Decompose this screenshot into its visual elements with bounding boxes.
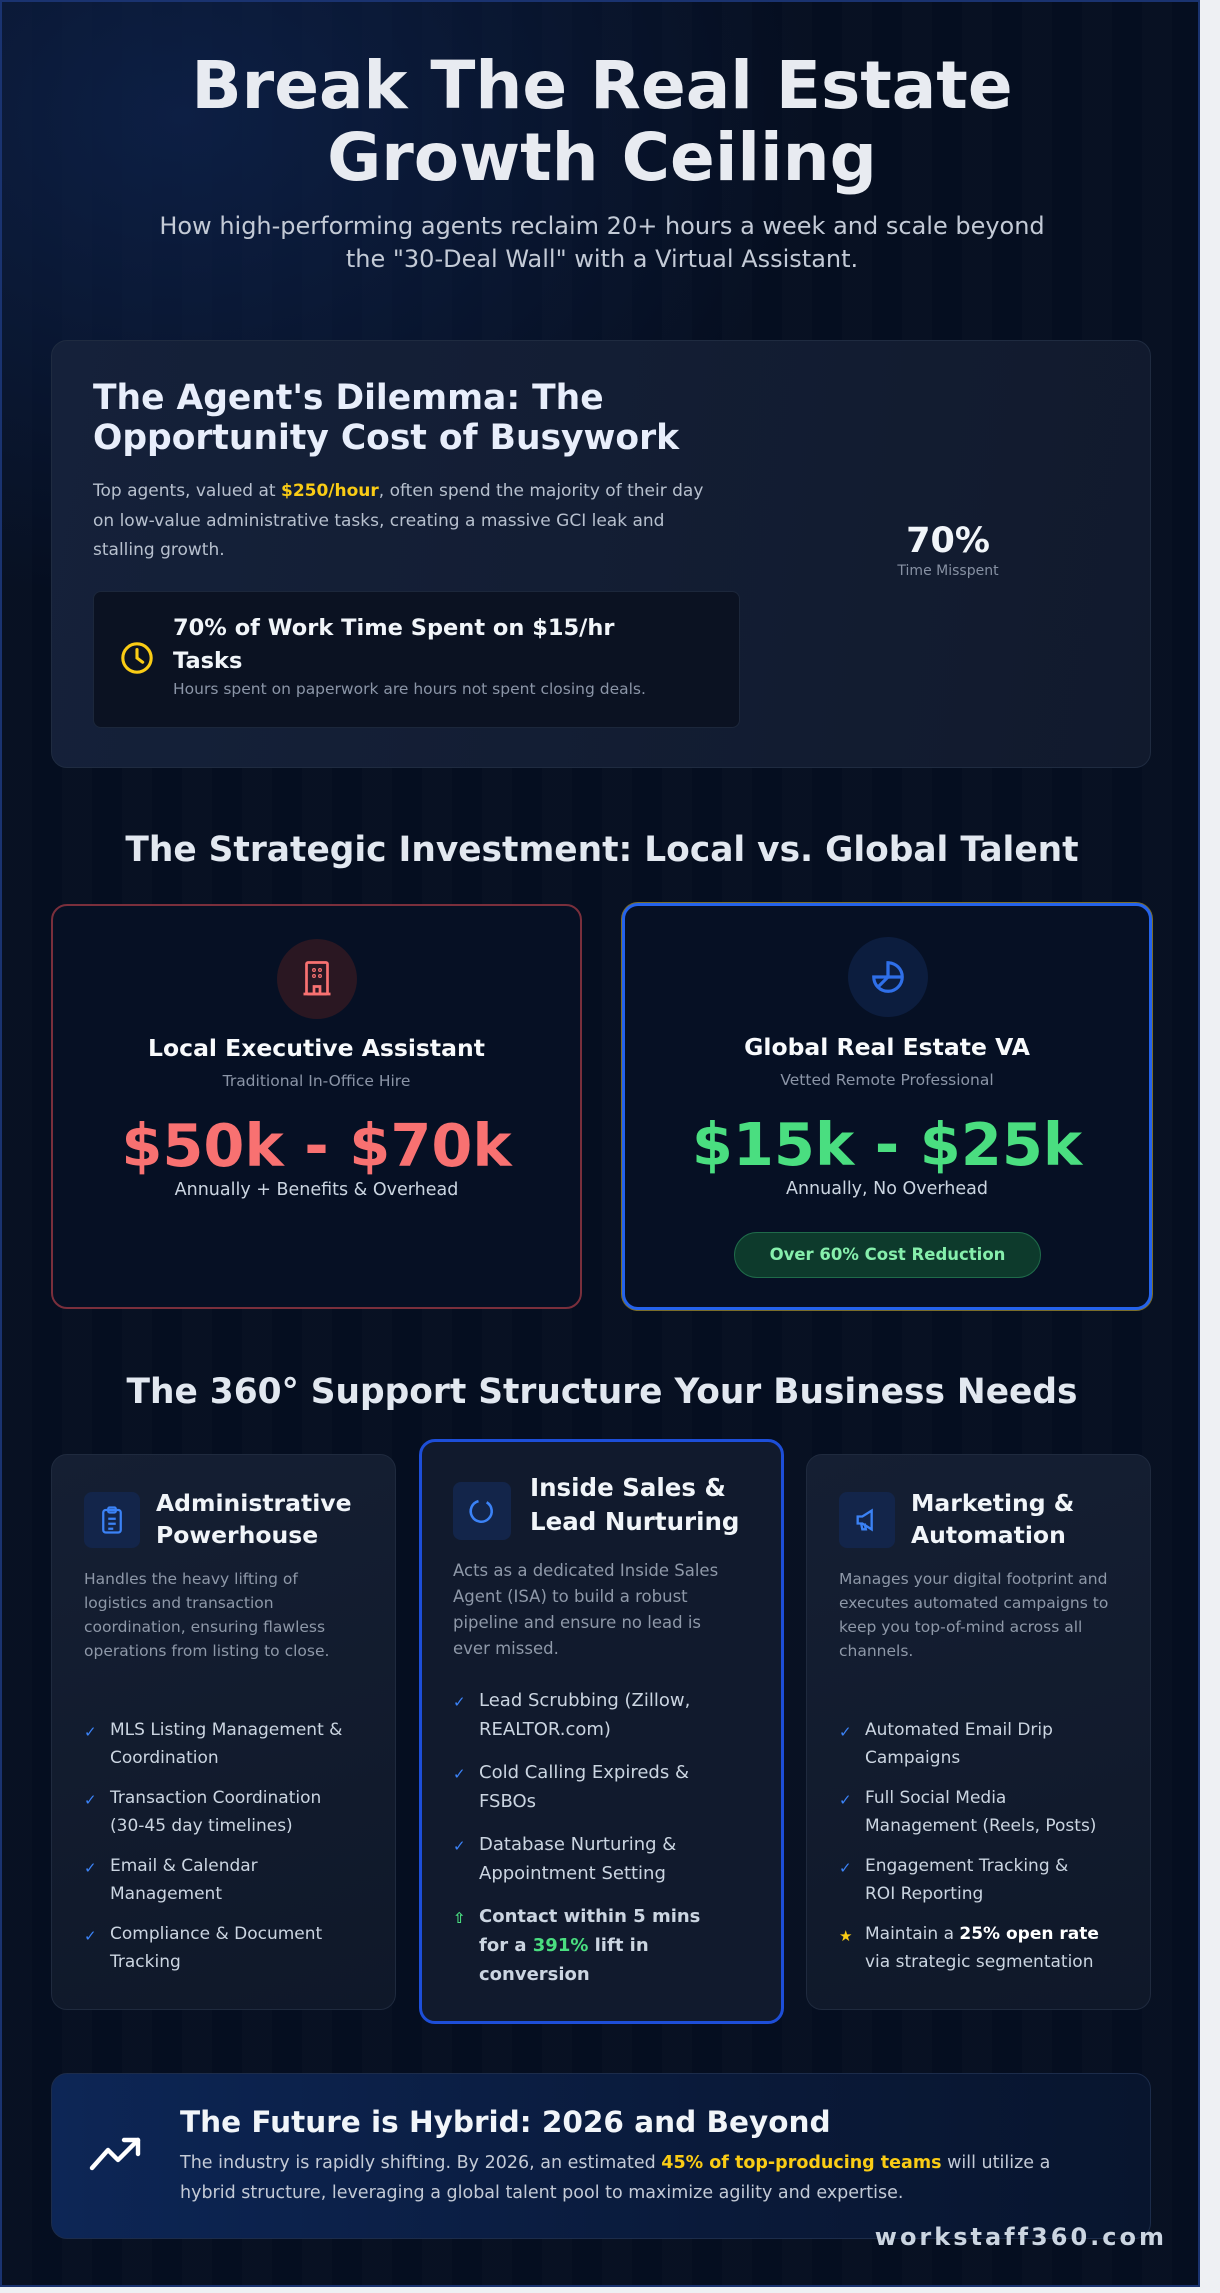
title bbox=[191, 47, 1013, 196]
panel: global real estate VA: Annually, No Overhead bbox=[786, 1179, 988, 1199]
list: marketing services: Automated Email Drip Campaigns bbox=[865, 1720, 1053, 1768]
list: inside sales services: ✓ bbox=[453, 1765, 466, 1783]
icon: clipboard bbox=[84, 1492, 140, 1548]
heading: strategic investment: The Strategic Investment: Local vs. Global Talent bbox=[125, 830, 1079, 870]
panel: future is hybrid bbox=[51, 2073, 1151, 2239]
list: admin services: Transaction Coordination (30-45 day timelines) bbox=[110, 1788, 321, 1836]
list: admin services: ✓ bbox=[84, 1723, 97, 1741]
badge: cost reduction bbox=[734, 1232, 1041, 1278]
icon: pie chart bbox=[848, 937, 928, 1017]
panel: global real estate VA: Vetted Remote Professional bbox=[780, 1071, 994, 1089]
list: marketing services: Engagement Tracking & ROI Reporting bbox=[865, 1856, 1068, 1904]
icon: trending up bbox=[90, 2138, 140, 2170]
panel: future is hybrid: The Future is Hybrid: 2026 and Beyond bbox=[180, 2105, 831, 2139]
panel: marketing & automation bbox=[806, 1454, 1151, 2010]
icon: building bbox=[277, 939, 357, 1019]
heading: 360 support: The 360° Support Structure Your Business Needs bbox=[127, 1372, 1077, 1412]
list: inside sales services: Lead Scrubbing (Zillow, REALTOR.com) bbox=[479, 1690, 690, 1740]
callout: 70% work time: Hours spent on paperwork are hours not spent closing deals. bbox=[173, 680, 646, 698]
stat: 70% time misspent: Time Misspent bbox=[897, 563, 999, 579]
subtitle bbox=[159, 212, 1045, 273]
panel: global real estate VA bbox=[622, 903, 1152, 1310]
list: inside sales services bbox=[453, 1690, 700, 1985]
heading: dilemma: The Agent's Dilemma: The bbox=[93, 378, 604, 418]
list: inside sales services: ✓ bbox=[453, 1837, 466, 1855]
text block: dilemma description: Top agents, valued at $250/hour, often spend the majority of their day on low-value administrative tasks, creating a massive GCI leak and stalling growth. bbox=[93, 481, 703, 560]
icon: clock bbox=[121, 642, 153, 674]
panel: marketing & automation: Automation bbox=[911, 1521, 1066, 1549]
list: inside sales services: Database Nurturing & Appointment Setting bbox=[479, 1834, 676, 1884]
panel: local executive assistant: Local Executive Assistant bbox=[148, 1034, 485, 1062]
panel: global real estate VA: $15k - $25k bbox=[692, 1110, 1082, 1179]
subtitle: How high-performing agents reclaim 20+ hours a week and scale beyond bbox=[159, 212, 1045, 240]
panel: inside sales: Lead Nurturing bbox=[530, 1507, 739, 1536]
stat: 70% time misspent: 70% bbox=[906, 521, 990, 561]
list: inside sales services: ✓ bbox=[453, 1693, 466, 1711]
panel: local executive assistant: Traditional In-Office Hire bbox=[223, 1072, 410, 1090]
list: marketing services bbox=[839, 1720, 1099, 1972]
panel: future is hybrid: The industry is rapidly shifting. By 2026, an estimated 45% of top-producing teams will utilize a hybrid structure, leveraging a global talent pool to maximize agility and expertise. bbox=[180, 2153, 1050, 2203]
list: admin services: ✓ bbox=[84, 1791, 97, 1809]
callout: 391% lift: ⇧ bbox=[453, 1909, 466, 1927]
panel: inside sales bbox=[419, 1439, 784, 2024]
stat: 70% time misspent bbox=[897, 521, 999, 579]
panel: administrative powerhouse: Powerhouse bbox=[156, 1521, 318, 1549]
list: admin services bbox=[84, 1720, 342, 1972]
heading: dilemma: Opportunity Cost of Busywork bbox=[93, 418, 679, 458]
panel: administrative powerhouse: Handles the heavy lifting of logistics and transaction coordination, ensuring flawless operations from listing to close. bbox=[84, 1570, 329, 1660]
panel: global real estate VA: Global Real Estate VA bbox=[744, 1033, 1030, 1061]
list: admin services: Email & Calendar Management bbox=[110, 1856, 258, 1904]
heading: dilemma bbox=[93, 378, 680, 458]
list: inside sales services: Cold Calling Expireds & FSBOs bbox=[479, 1762, 689, 1812]
panel: local executive assistant bbox=[51, 904, 582, 1309]
callout: 391% lift: Contact within 5 mins for a 391% lift in conversion bbox=[479, 1906, 700, 1985]
list: admin services: ✓ bbox=[84, 1927, 97, 1945]
icon: refresh circle bbox=[453, 1482, 511, 1540]
list: marketing services: Maintain a 25% open rate via strategic segmentation bbox=[865, 1924, 1099, 1972]
list: marketing services: Full Social Media Management (Reels, Posts) bbox=[865, 1788, 1096, 1836]
list: marketing services: ✓ bbox=[839, 1723, 852, 1741]
panel: agent's dilemma bbox=[51, 340, 1151, 768]
list: marketing services: ★ bbox=[839, 1927, 852, 1945]
panel: inside sales: Acts as a dedicated Inside Sales Agent (ISA) to build a robust pipeline and ensure no lead is ever missed. bbox=[453, 1561, 718, 1658]
panel: administrative powerhouse bbox=[51, 1454, 396, 2010]
list: admin services: Compliance & Document Tracking bbox=[110, 1924, 322, 1972]
list: marketing services: ✓ bbox=[839, 1859, 852, 1877]
panel: local executive assistant: Annually + Benefits & Overhead bbox=[175, 1180, 458, 1200]
badge: cost reduction: Over 60% Cost Reduction bbox=[770, 1245, 1005, 1264]
brand: workstaff360.com: workstaff360.com bbox=[875, 2223, 1167, 2251]
list: marketing services: ✓ bbox=[839, 1791, 852, 1809]
panel: inside sales: Inside Sales & bbox=[530, 1473, 726, 1502]
panel: local executive assistant: $50k - $70k bbox=[121, 1111, 512, 1180]
list: admin services: MLS Listing Management & Coordination bbox=[110, 1720, 342, 1768]
subtitle: the "30-Deal Wall" with a Virtual Assistant. bbox=[346, 245, 858, 273]
icon: megaphone bbox=[839, 1492, 895, 1548]
panel: marketing & automation: Manages your digital footprint and executes automated campaigns to keep you top-of-mind across all channels. bbox=[839, 1570, 1108, 1660]
panel: administrative powerhouse: Administrative bbox=[156, 1489, 352, 1517]
callout: 70% work time: 70% of Work Time Spent on $15/hr Tasks bbox=[173, 615, 615, 674]
panel: marketing & automation: Marketing & bbox=[911, 1489, 1074, 1517]
list: admin services: ✓ bbox=[84, 1859, 97, 1877]
title: Growth Ceiling bbox=[327, 119, 877, 196]
title: Break The Real Estate bbox=[191, 47, 1013, 124]
callout: 70% work time bbox=[93, 591, 740, 728]
